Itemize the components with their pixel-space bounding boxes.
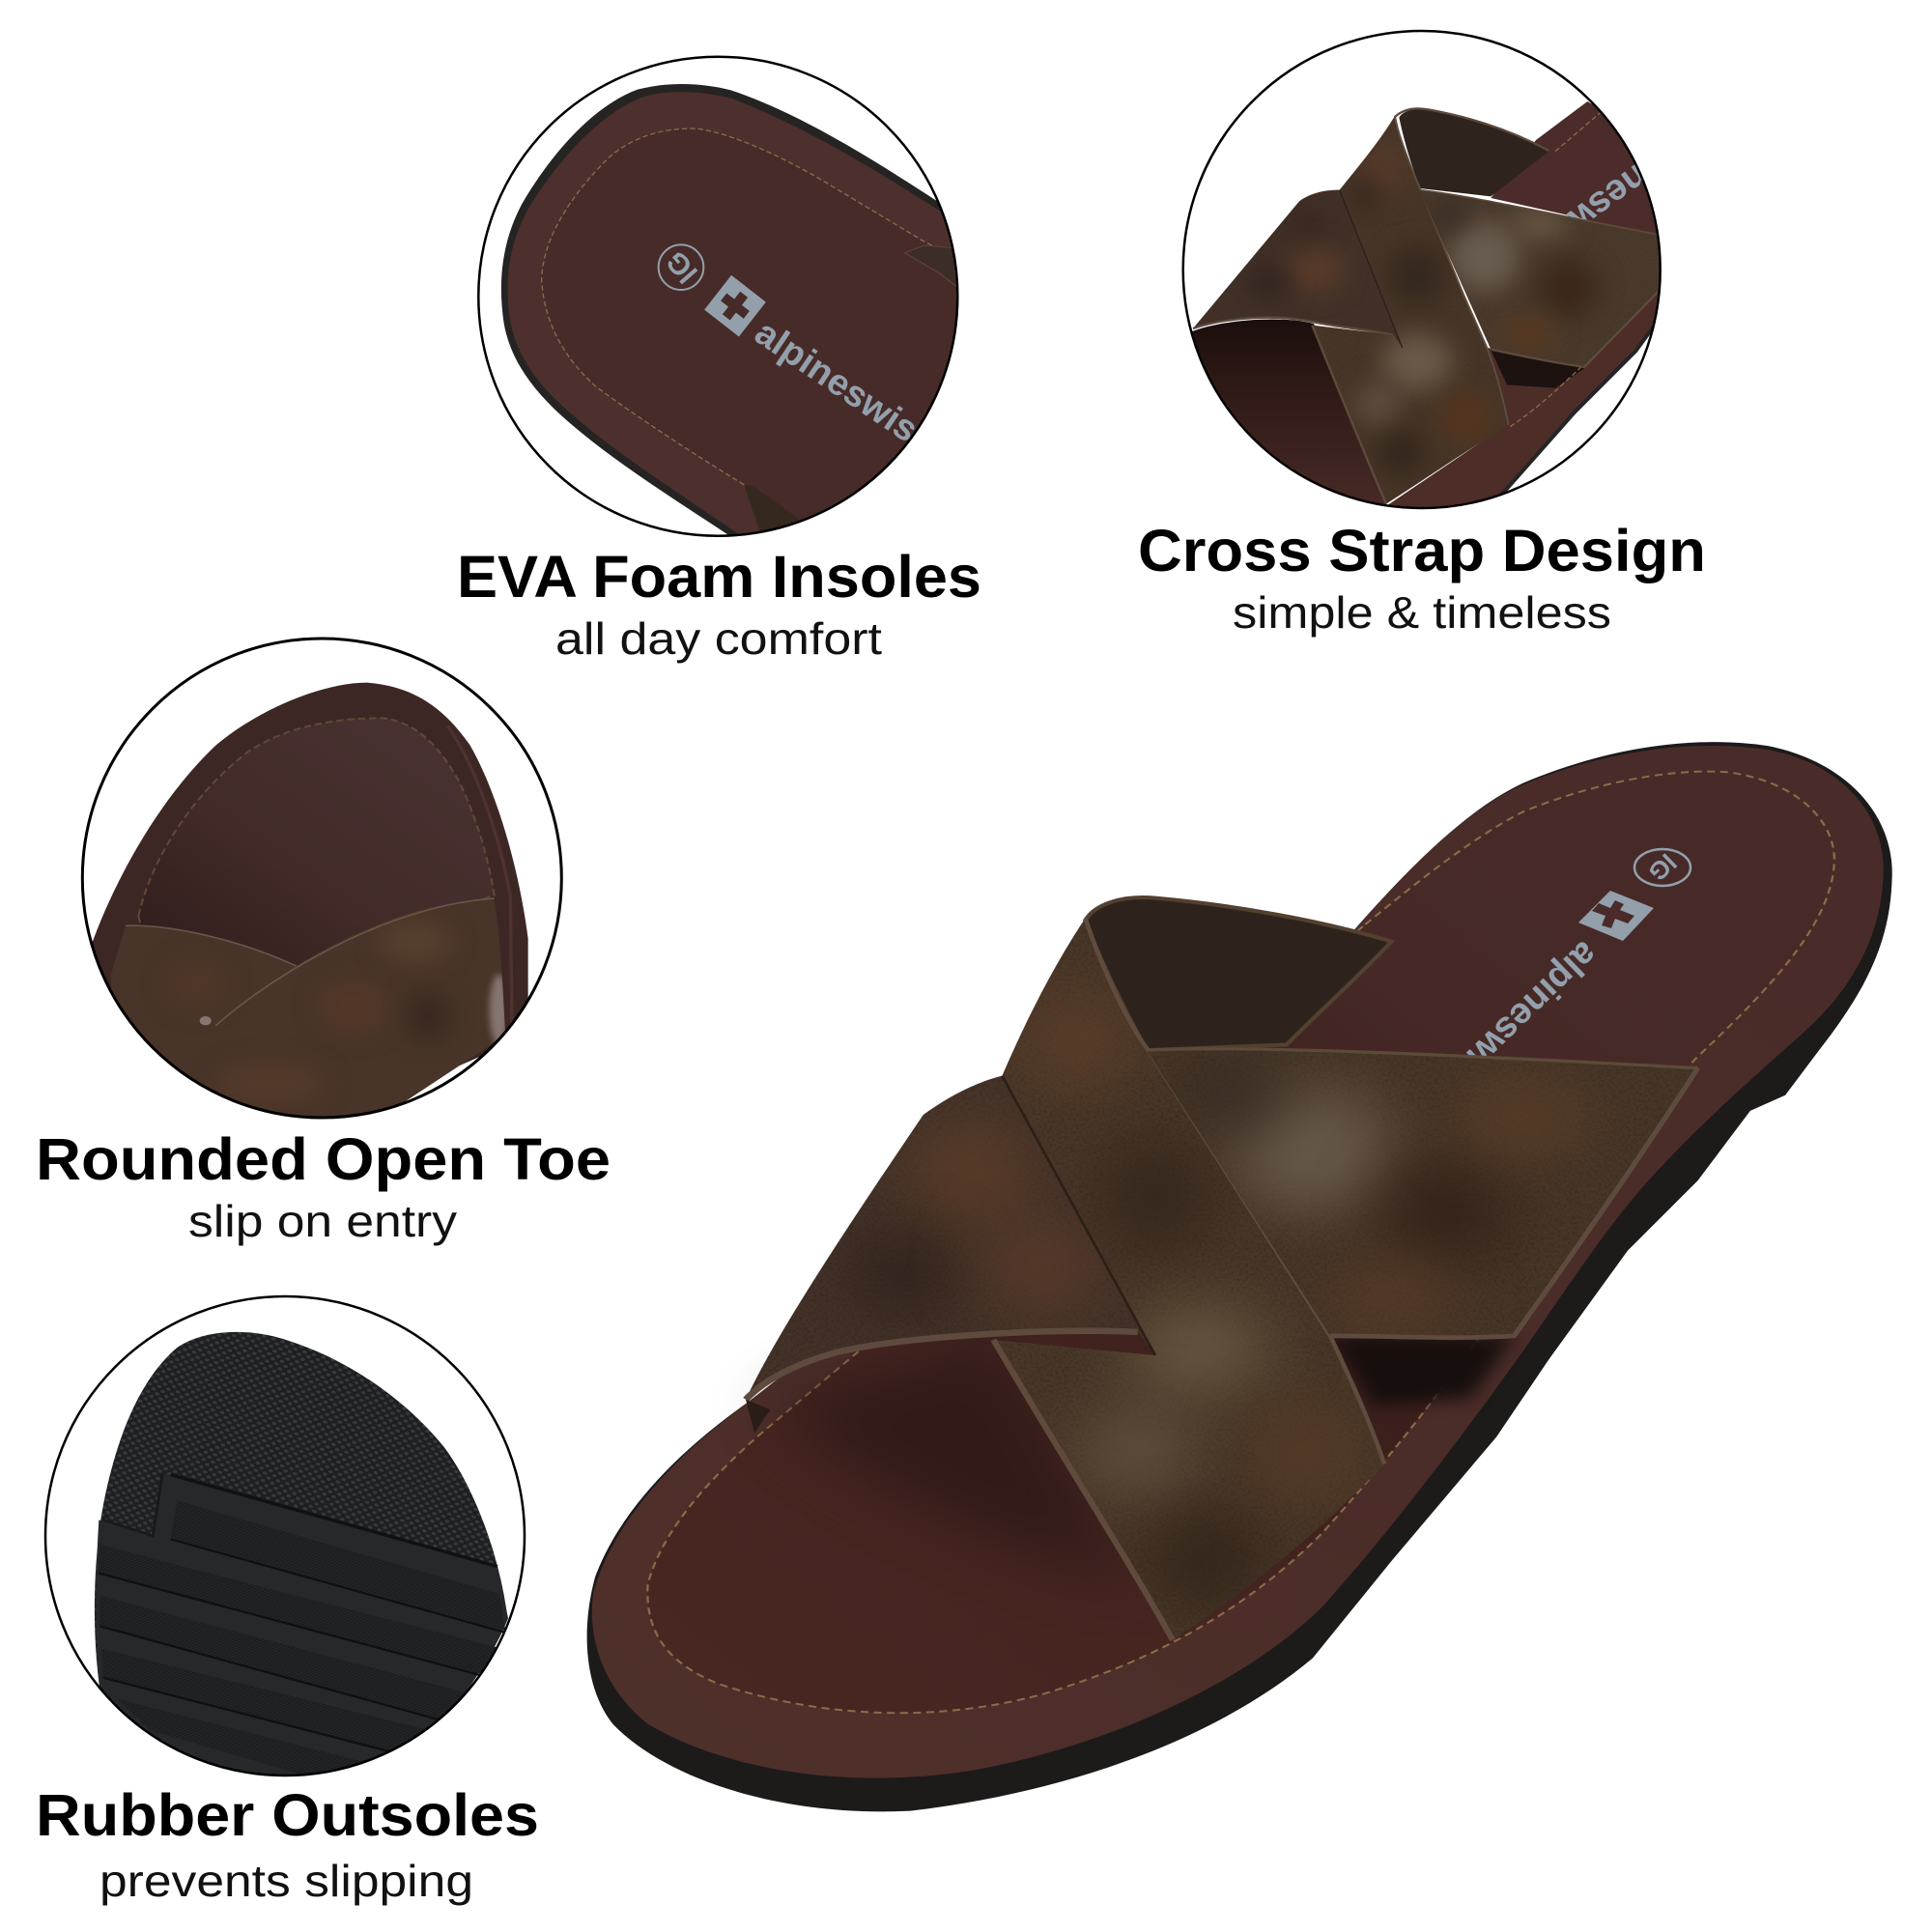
insole rim <box>592 746 1884 1778</box>
frame <box>45 1296 525 1776</box>
strap <box>111 899 502 1117</box>
heading: EVA Foam Insoles <box>457 544 981 610</box>
panel: cross strap design <box>1138 31 1708 638</box>
strap wedge top <box>905 245 956 287</box>
subheading: simple & timeless <box>1233 587 1611 638</box>
subheading: prevents slipping <box>99 1856 473 1906</box>
strap wedge bottom <box>744 485 798 531</box>
photo crop: toe <box>90 683 528 1148</box>
footbed <box>541 128 932 487</box>
photo crop: tread <box>95 1332 508 1804</box>
strap: diagonal band <box>993 919 1384 1640</box>
panel: rounded open toe <box>36 639 611 1246</box>
logo: brand text: alpineswiss <box>748 312 942 462</box>
logo: size mark: lG <box>1643 848 1682 887</box>
strap: left band <box>746 1076 1155 1433</box>
logo: brand text: alpineswiss <box>1429 933 1605 1106</box>
logo: size mark <box>1634 848 1690 887</box>
logo: size text: lG <box>660 244 704 289</box>
logo fragment: alpineswiss <box>1516 118 1708 273</box>
strap back <box>1399 109 1548 196</box>
rim <box>93 682 528 1066</box>
subheading: slip on entry <box>188 1196 457 1246</box>
panel: EVA foam insoles <box>457 57 988 664</box>
main sandal <box>587 742 1892 1811</box>
photo crop: insole <box>500 84 956 535</box>
footbed <box>137 717 496 931</box>
strap tag <box>200 1016 212 1025</box>
heading: Rubber Outsoles <box>36 1782 539 1848</box>
heading: Rounded Open Toe <box>36 1126 611 1192</box>
diagonal band <box>1312 116 1509 504</box>
strap back <box>1085 897 1392 1050</box>
sole edge <box>500 84 952 535</box>
logo: swiss cross <box>1578 891 1654 941</box>
heading: Cross Strap Design <box>1138 518 1706 583</box>
footbed shadows <box>770 1340 1138 1584</box>
frame <box>82 639 561 1118</box>
strap: right band <box>1147 1049 1698 1338</box>
footbed <box>647 772 1834 1713</box>
panel: rubber outsoles <box>36 1296 539 1906</box>
right band <box>1419 190 1662 367</box>
ribbed area <box>96 1473 508 1804</box>
photo crop: straps <box>1192 101 1660 507</box>
frame <box>478 57 957 536</box>
subheading: all day comfort <box>555 613 882 664</box>
toe footbed <box>1179 320 1388 507</box>
rim <box>508 92 952 533</box>
heel footbed <box>1491 101 1658 238</box>
logo: size mark <box>659 244 703 290</box>
rim and outsole lower right <box>1384 287 1662 507</box>
frame <box>1183 31 1661 508</box>
logo: swiss cross <box>704 275 766 336</box>
outsole <box>587 742 1892 1811</box>
left band <box>1193 190 1403 348</box>
dotted toe area <box>95 1332 507 1804</box>
textured strips <box>171 1500 505 1631</box>
